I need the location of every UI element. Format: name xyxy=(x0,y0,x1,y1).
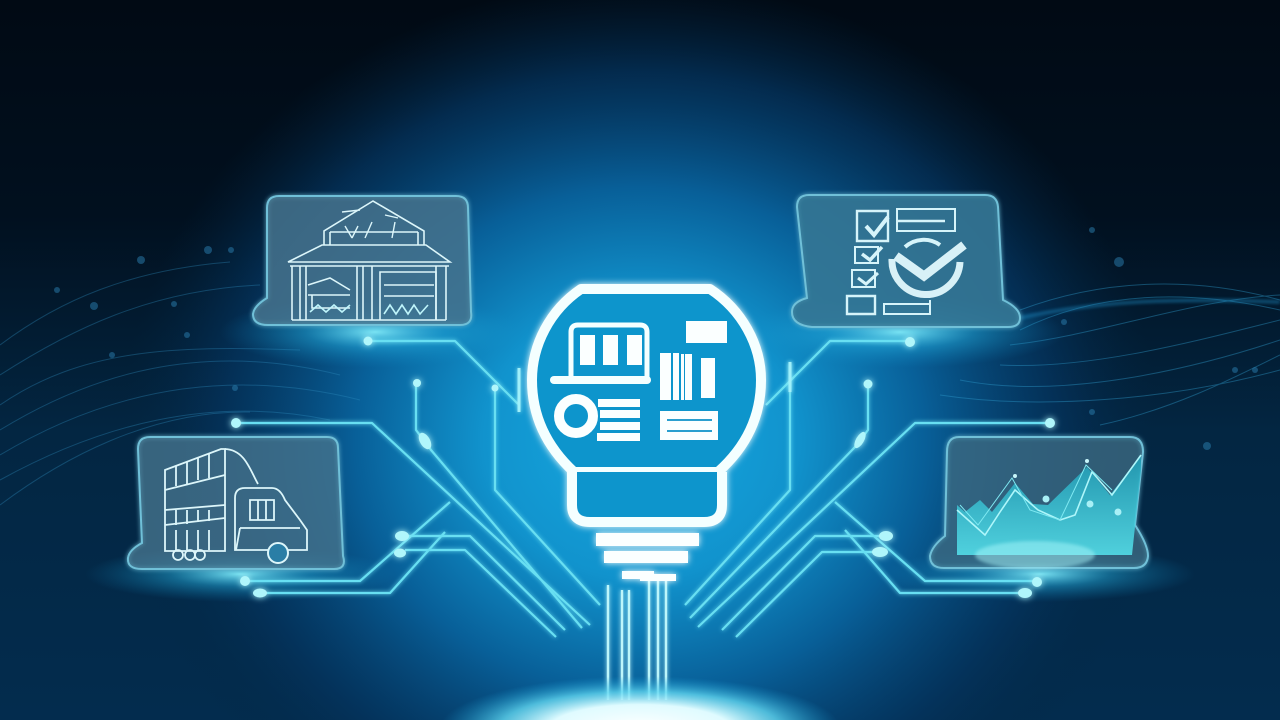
icon: bars xyxy=(660,353,715,400)
icon: truck xyxy=(165,449,307,563)
bulb side marks xyxy=(519,362,790,412)
icon: form card xyxy=(660,411,718,440)
chart: area graph xyxy=(957,455,1141,569)
bulb xyxy=(532,289,761,581)
bulb icon set xyxy=(554,321,727,441)
circuit nodes xyxy=(231,336,1055,598)
right edge streak xyxy=(1020,300,1280,318)
icon: warehouse outline xyxy=(288,201,450,320)
icon: laptop xyxy=(554,325,647,380)
bottom vertical lines xyxy=(608,580,666,700)
bulb neck xyxy=(572,472,722,522)
circuit lines right xyxy=(685,341,1050,637)
wave dots right xyxy=(1061,227,1258,450)
circuit lines left xyxy=(235,341,600,637)
bulb screw stripes xyxy=(596,533,699,581)
bulb glass and base outline xyxy=(532,289,761,472)
wave dots left xyxy=(54,246,238,391)
panel glows xyxy=(85,296,1195,602)
panel: truck xyxy=(128,437,344,569)
icon: checklist xyxy=(847,209,964,314)
panel: chart xyxy=(930,437,1148,568)
panel: warehouse xyxy=(253,196,471,325)
panel: checklist xyxy=(792,195,1020,327)
bottom light glow xyxy=(380,660,900,720)
icon: top card xyxy=(686,321,727,343)
wave lines left xyxy=(0,262,360,505)
icon: gear with lines xyxy=(559,399,640,441)
wave lines right xyxy=(940,284,1280,425)
